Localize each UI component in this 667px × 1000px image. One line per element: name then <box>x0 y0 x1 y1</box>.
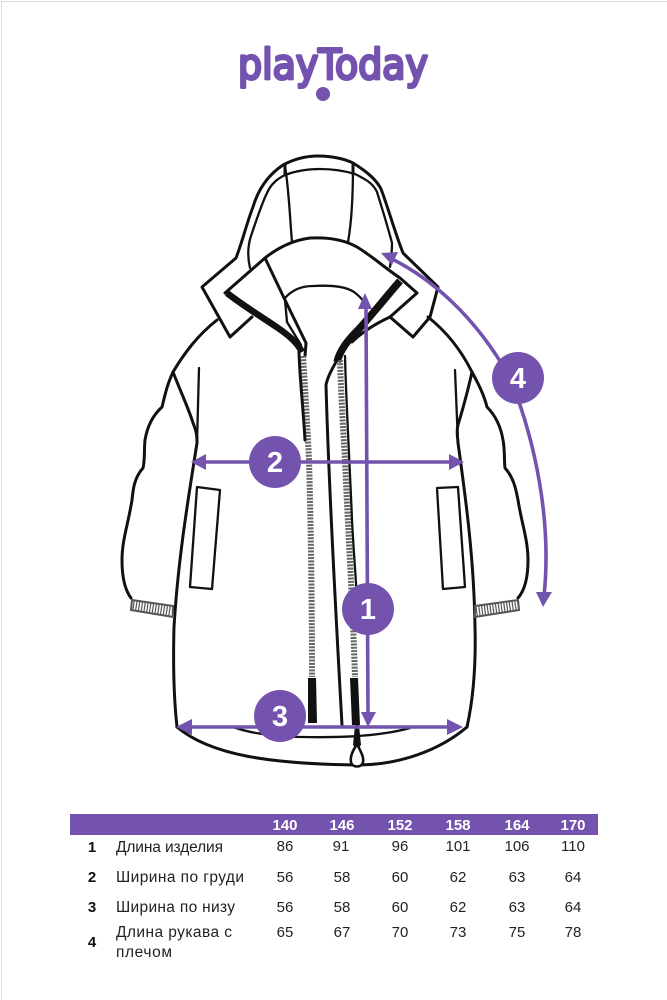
row 3: 3 <box>88 899 96 916</box>
row 3: 62 <box>450 899 466 916</box>
arrow 4: sleeve length <box>381 252 552 607</box>
body and shoulders <box>173 317 475 765</box>
arrow 1: garment length <box>342 293 394 727</box>
table header: 140 <box>272 817 298 834</box>
zipper and placket <box>299 350 360 725</box>
row 2: Ширина по груди <box>116 869 244 886</box>
row 3: 60 <box>392 899 408 916</box>
table header: 158 <box>445 817 471 834</box>
table header: 170 <box>560 817 586 834</box>
arrow 1: garment length: 1 <box>360 594 376 626</box>
row 2: 56 <box>277 869 293 886</box>
arrow 3: hem width <box>176 690 463 742</box>
row 1: 110 <box>561 838 585 855</box>
row 4: плечом <box>116 944 172 961</box>
row 2: 58 <box>334 869 350 886</box>
logo: playToday: playToday <box>238 40 428 89</box>
row 1: 91 <box>333 838 349 855</box>
row 2: 60 <box>392 869 408 886</box>
row 4: 67 <box>334 924 350 941</box>
row 4: 65 <box>277 924 293 941</box>
size table <box>70 814 598 961</box>
row 1: 101 <box>445 838 471 855</box>
row 1: 86 <box>277 838 293 855</box>
collar <box>225 238 417 362</box>
table header: 164 <box>504 817 530 834</box>
table header: 146 <box>329 817 355 834</box>
row 4: 73 <box>450 924 466 941</box>
row 3: 63 <box>509 899 525 916</box>
row 1: 96 <box>392 838 408 855</box>
pockets <box>190 487 465 589</box>
row 2: 64 <box>565 869 581 886</box>
row 2: 2 <box>88 869 96 886</box>
table header: 152 <box>387 817 413 834</box>
row 3: Ширина по низу <box>116 899 235 916</box>
arrow 4: sleeve length: 4 <box>510 363 526 395</box>
row 1 <box>88 838 585 856</box>
left sleeve <box>122 372 197 617</box>
row 4: 78 <box>565 924 581 941</box>
arrow 2: chest width <box>191 436 464 488</box>
table header <box>70 814 598 835</box>
row 3: 64 <box>565 899 581 916</box>
row 2: 62 <box>450 869 466 886</box>
row 4: 75 <box>509 924 525 941</box>
arrow 2: chest width: 2 <box>267 447 283 479</box>
row 1: 1 <box>88 839 96 856</box>
row 1: Длина изделия <box>116 839 223 856</box>
hood <box>202 156 438 337</box>
row 4: 70 <box>392 924 408 941</box>
row 3: 56 <box>277 899 293 916</box>
row 3: 58 <box>334 899 350 916</box>
row 2 <box>88 869 581 886</box>
row 4: Длина рукава с <box>116 924 232 941</box>
row 2: 63 <box>509 869 525 886</box>
row 1: 106 <box>504 838 530 855</box>
right sleeve <box>457 372 528 617</box>
row 4: 4 <box>88 934 97 951</box>
zipper puller <box>351 725 363 766</box>
row 4 <box>88 924 581 961</box>
arrow 3: hem width: 3 <box>272 701 288 733</box>
jacket line drawing <box>122 156 528 766</box>
row 3 <box>88 899 581 916</box>
